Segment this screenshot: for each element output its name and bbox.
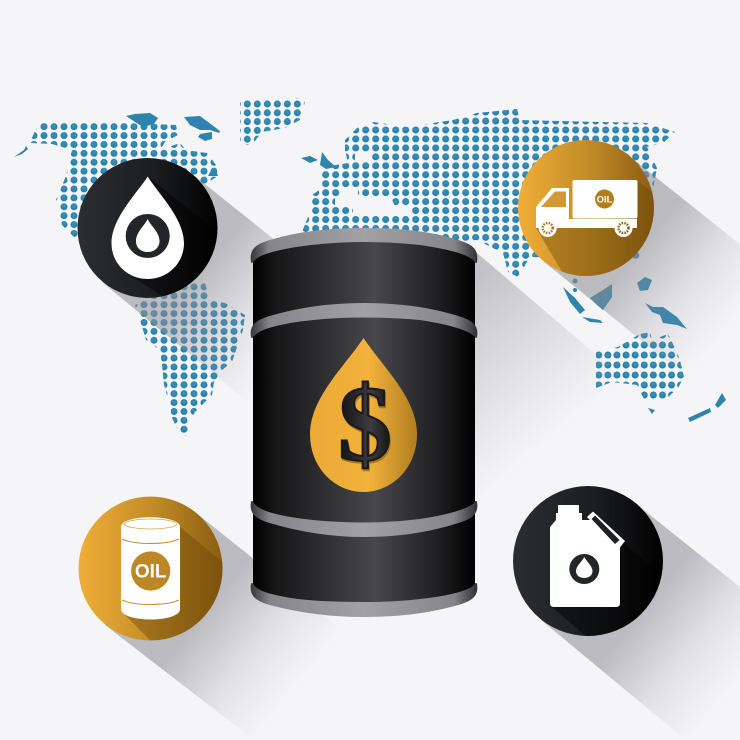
Eurasia	[302, 109, 675, 277]
shadow: can badge	[105, 512, 365, 740]
South America	[135, 283, 245, 437]
Greenland	[240, 98, 306, 145]
bottom rim	[252, 584, 476, 616]
icon long shadow	[552, 544, 662, 636]
Australia	[596, 332, 684, 401]
dollar sign: $	[338, 365, 392, 484]
icon long shadow	[122, 176, 218, 296]
badge: oil jug	[513, 486, 663, 636]
icon long shadow	[536, 180, 654, 276]
shadow: drop badge	[103, 173, 360, 420]
gold drop with dollar sign	[310, 338, 417, 492]
badge: truck	[518, 140, 654, 276]
icon long shadow	[124, 527, 222, 640]
barrel body	[253, 240, 475, 604]
Alaska tail	[14, 146, 28, 157]
oil label: OIL	[135, 562, 167, 582]
badge: oil can	[78, 496, 222, 640]
icon: ring with inner drop	[126, 214, 170, 258]
shadow: truck badge	[543, 155, 740, 400]
wheels	[539, 219, 632, 237]
icon: can	[121, 517, 180, 620]
lower hoop	[252, 502, 476, 536]
shadow: barrel	[470, 247, 740, 740]
top rim	[252, 229, 476, 262]
oil label: OIL	[597, 194, 613, 206]
shadow: jug badge	[541, 503, 740, 740]
islands	[126, 113, 726, 422]
dotted world map	[14, 98, 726, 437]
icon: truck	[536, 180, 638, 237]
icon: jug	[550, 505, 625, 607]
badge: oil drop	[78, 158, 218, 298]
upper hoop	[252, 304, 476, 337]
dollar shadow: $	[339, 367, 393, 486]
oil barrel	[252, 229, 476, 616]
icon: white drop	[112, 176, 184, 279]
North America	[30, 123, 218, 260]
